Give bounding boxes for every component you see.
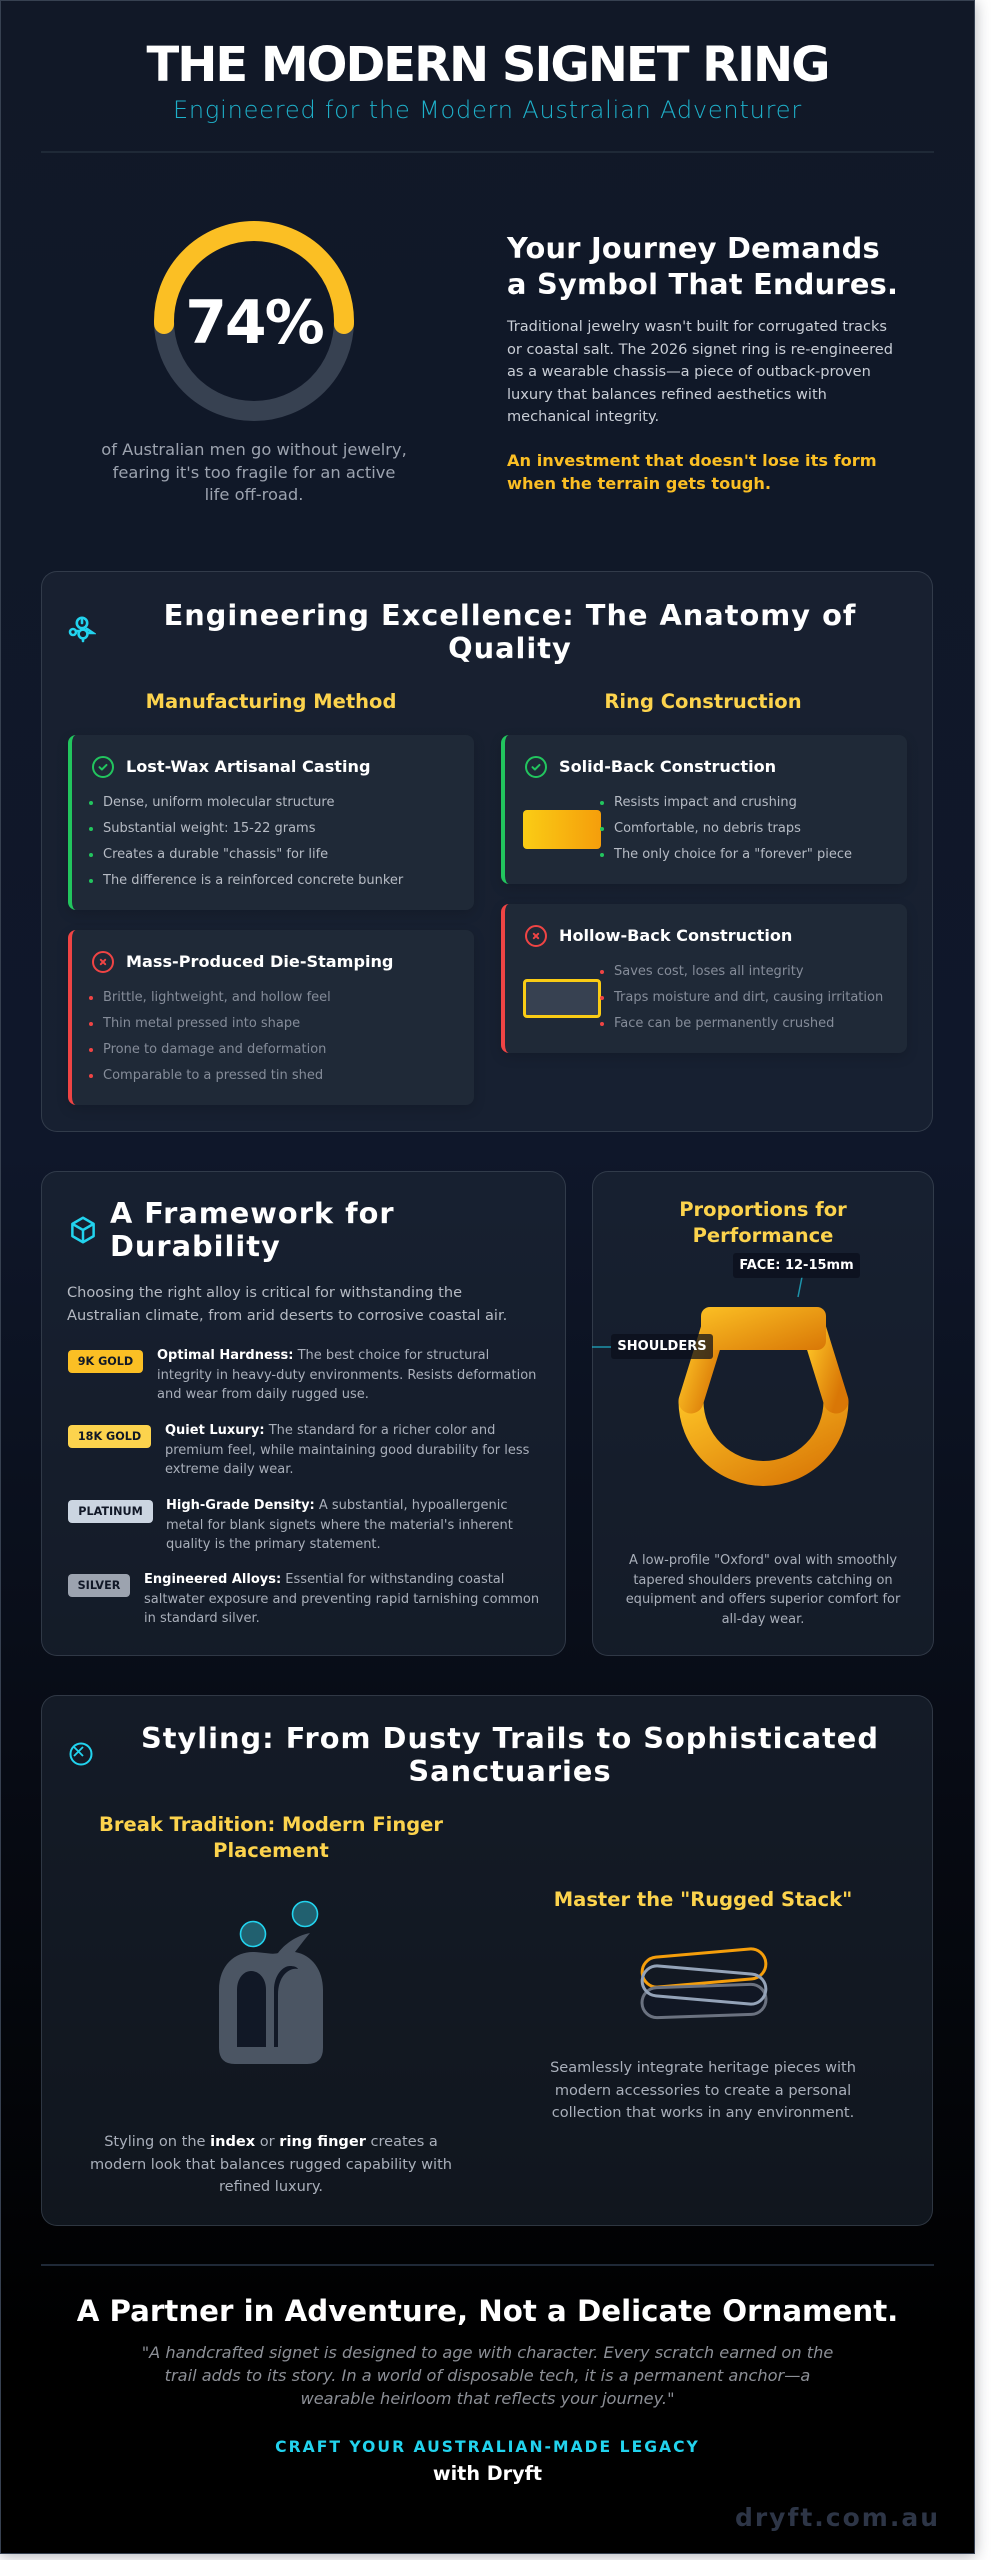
badge: 9k gold xyxy=(68,1350,143,1373)
text: 18k gold xyxy=(165,1423,529,1477)
card list: Dense, uniform molecular structure xyxy=(103,795,334,810)
badge: 9k gold: 9K GOLD xyxy=(78,1355,133,1368)
card list: Creates a durable "chassis" for life xyxy=(103,847,328,862)
text: 9k gold: Optimal Hardness: The best choice for structural xyxy=(157,1348,489,1363)
card: lost-wax casting xyxy=(68,735,474,910)
ring diagram xyxy=(678,1307,848,1486)
finger placement text xyxy=(90,2133,452,2195)
stat value: 74% xyxy=(185,288,323,358)
description: A low-profile "Oxford" oval with smoothly xyxy=(629,1553,897,1568)
section heading: A Framework for xyxy=(110,1196,395,1230)
icon: check xyxy=(92,756,114,778)
text: platinum: quality is the primary statement. xyxy=(166,1537,381,1552)
subheading: rugged stack: Master the "Rugged Stack" xyxy=(554,1888,852,1911)
badge: platinum xyxy=(68,1500,153,1523)
intro text: Australian climate, from arid deserts to corrosive coastal air. xyxy=(67,1307,507,1324)
stat caption: life off-road. xyxy=(205,485,303,504)
column heading: construction: Ring Construction xyxy=(604,690,802,713)
text: 18k gold: Quiet Luxury: The standard for a richer color and xyxy=(165,1423,495,1438)
panel heading: Proportions for xyxy=(679,1198,847,1221)
intro paragraph: as a wearable chassis—a piece of outback-proven xyxy=(507,363,871,380)
text: silver: Engineered Alloys: Essential for withstanding coastal xyxy=(144,1572,504,1587)
icon: engineering gears xyxy=(68,616,96,642)
subheading: finger placement: Break Tradition: Modern Finger xyxy=(99,1813,443,1836)
title: THE MODERN SIGNET RING xyxy=(146,37,829,93)
callout: shoulders: SHOULDERS xyxy=(617,1339,707,1354)
intro text: Choosing the right alloy is critical for withstanding the xyxy=(67,1284,462,1301)
card heading: Mass-Produced Die-Stamping xyxy=(126,952,393,971)
hand illustration xyxy=(219,1900,323,2064)
badge: platinum: PLATINUM xyxy=(78,1505,143,1518)
intro highlight: An investment that doesn't lose its form xyxy=(507,451,877,470)
leader lines xyxy=(592,1277,803,1348)
text: 18k gold: extreme daily wear. xyxy=(165,1462,294,1477)
panel: engineering excellence xyxy=(41,571,933,1132)
section heading: Engineering Excellence: The Anatomy of xyxy=(164,598,856,632)
icon: check xyxy=(525,756,547,778)
card list: Resists impact and crushing xyxy=(614,795,797,810)
description xyxy=(626,1553,900,1626)
panel: styling xyxy=(41,1695,933,2226)
solid ring cross-section xyxy=(523,810,601,849)
section heading xyxy=(141,1721,879,1788)
finger placement text: modern look that balances rugged capability with xyxy=(90,2156,452,2173)
card: die-stamping xyxy=(68,930,474,1105)
panel heading: Performance xyxy=(693,1224,833,1247)
intro text xyxy=(67,1284,507,1324)
brand line: with Dryft xyxy=(433,2462,542,2485)
icon: compass xyxy=(70,1742,92,1766)
card: hollow-back xyxy=(501,904,907,1053)
intro heading xyxy=(506,231,898,301)
intro highlight: when the terrain gets tough. xyxy=(507,474,771,493)
finger placement text: refined luxury. xyxy=(219,2178,323,2195)
website watermark: dryft.com.au xyxy=(735,2503,940,2532)
panel heading xyxy=(679,1198,847,1247)
rugged stack text: modern accessories to create a personal xyxy=(555,2082,851,2099)
rugged stack text: collection that works in any environment. xyxy=(552,2104,854,2121)
description: all-day wear. xyxy=(722,1612,804,1626)
text: silver xyxy=(144,1572,539,1626)
card heading: Lost-Wax Artisanal Casting xyxy=(126,757,370,776)
card list xyxy=(89,795,404,888)
card list: Traps moisture and dirt, causing irritation xyxy=(614,990,883,1005)
text: silver: saltwater exposure and preventing rapid tarnishing common xyxy=(144,1592,539,1606)
badge: 18k gold: 18K GOLD xyxy=(78,1430,141,1443)
column heading: manufacturing: Manufacturing Method xyxy=(146,690,396,713)
closing heading: A Partner in Adventure, Not a Delicate Ornament. xyxy=(77,2294,898,2328)
callout: face xyxy=(733,1253,860,1278)
intro paragraph: or coastal salt. The 2026 signet ring is re-engineered xyxy=(507,341,893,358)
intro highlight xyxy=(507,451,877,493)
stacked rings illustration xyxy=(640,1947,768,2020)
card list: Brittle, lightweight, and hollow feel xyxy=(103,990,331,1005)
callout: shoulders xyxy=(611,1334,713,1359)
card list xyxy=(600,795,852,862)
card: solid-back xyxy=(501,735,907,884)
panel: proportions for performance xyxy=(592,1171,934,1656)
subheading: finger placement xyxy=(99,1813,443,1862)
text: 18k gold: premium feel, while maintaining good durability for less xyxy=(165,1442,529,1458)
card list: Prone to damage and deformation xyxy=(103,1042,326,1057)
finger placement text: Styling on the index or ring finger creates a xyxy=(104,2133,438,2150)
intro paragraph xyxy=(506,318,893,425)
section heading: Sanctuaries xyxy=(408,1754,612,1788)
card heading: Solid-Back Construction xyxy=(559,757,776,776)
section heading: Durability xyxy=(110,1229,281,1263)
section heading xyxy=(164,598,856,665)
section heading: Styling: From Dusty Trails to Sophisticated xyxy=(141,1721,879,1755)
call to action: CRAFT YOUR AUSTRALIAN-MADE LEGACY xyxy=(275,2438,700,2456)
closing quote: trail adds to its story. In a world of disposable tech, it is a permanent anchor—a xyxy=(165,2366,810,2385)
stat ring: 74% xyxy=(154,221,354,421)
stat caption: fearing it's too fragile for an active xyxy=(113,463,395,482)
intro heading: a Symbol That Endures. xyxy=(507,267,898,301)
card list: The difference is a reinforced concrete bunker xyxy=(103,873,403,888)
stat caption: of Australian men go without jewelry, xyxy=(101,440,407,459)
section heading: Quality xyxy=(448,631,572,665)
card list: Comfortable, no debris traps xyxy=(614,821,801,836)
card heading: Hollow-Back Construction xyxy=(559,926,792,945)
description: tapered shoulders prevents catching on xyxy=(633,1572,893,1588)
card list: Face can be permanently crushed xyxy=(614,1016,834,1031)
card list xyxy=(600,964,883,1031)
text: silver: in standard silver. xyxy=(144,1611,260,1626)
badge: silver: SILVER xyxy=(78,1579,120,1592)
card list xyxy=(89,990,331,1083)
text: platinum: metal for blank signets where the material's inherent xyxy=(166,1518,513,1532)
badge: silver xyxy=(68,1574,130,1597)
closing quote xyxy=(142,2343,833,2408)
card list: Saves cost, loses all integrity xyxy=(614,964,804,979)
icon: cross xyxy=(525,925,547,947)
card list: Thin metal pressed into shape xyxy=(103,1016,300,1031)
text: 9k gold: and wear from daily rugged use. xyxy=(157,1387,369,1402)
description: equipment and offers superior comfort for xyxy=(626,1592,900,1607)
rugged stack text xyxy=(550,2059,856,2121)
intro heading: Your Journey Demands xyxy=(507,231,880,265)
card list: The only choice for a "forever" piece xyxy=(614,847,852,862)
subtitle: Engineered for the Modern Australian Adventurer xyxy=(173,96,802,124)
text: 9k gold xyxy=(157,1348,536,1402)
stat caption xyxy=(101,440,407,504)
section heading xyxy=(110,1196,395,1263)
text: platinum xyxy=(166,1498,513,1552)
closing quote: wearable heirloom that reflects your journey." xyxy=(300,2389,675,2408)
callout: face: FACE: 12-15mm xyxy=(739,1258,854,1273)
rugged stack text: Seamlessly integrate heritage pieces with xyxy=(550,2059,856,2076)
intro paragraph: Traditional jewelry wasn't built for corrugated tracks xyxy=(507,318,887,335)
subheading: finger placement: Placement xyxy=(213,1839,329,1862)
badge: 18k gold xyxy=(68,1425,151,1448)
card list: Comparable to a pressed tin shed xyxy=(103,1068,323,1083)
intro paragraph: luxury that balances refined aesthetics with xyxy=(507,386,827,403)
intro paragraph: mechanical integrity. xyxy=(507,408,659,425)
icon: cross xyxy=(92,951,114,973)
card list: Substantial weight: 15-22 grams xyxy=(103,821,316,836)
text: platinum: High-Grade Density: A substantial, hypoallergenic xyxy=(166,1498,508,1513)
hollow ring cross-section xyxy=(523,979,601,1018)
text: 9k gold: integrity in heavy-duty environments. Resists deformation xyxy=(157,1368,536,1382)
icon: cube xyxy=(71,1216,95,1244)
closing quote: "A handcrafted signet is designed to age with character. Every scratch earned on the xyxy=(142,2343,833,2362)
panel: framework for durability xyxy=(41,1171,566,1656)
